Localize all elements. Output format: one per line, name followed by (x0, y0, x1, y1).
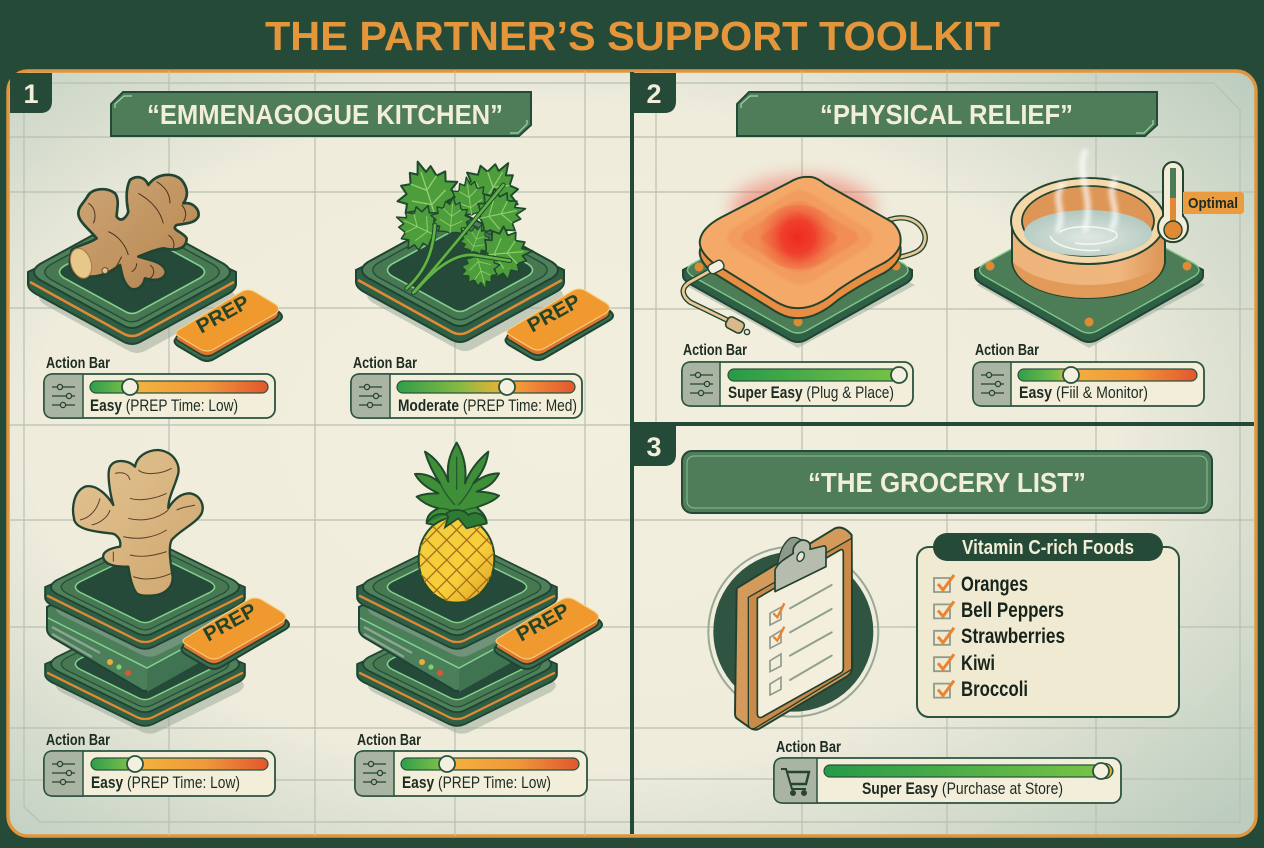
button: prep (494, 598, 602, 669)
action bar: easy: Action Bar (46, 355, 110, 372)
action bar: easy fiil and monitor: Easy (Fiil & Monitor) (1019, 384, 1148, 402)
list: vitamin c-rich foods (917, 533, 1179, 717)
action bar: easy: Easy (PREP Time: Low) (90, 397, 238, 415)
action bar: moderate: Action Bar (353, 355, 417, 372)
icon: shopping cart (781, 769, 809, 795)
badge 1 (10, 73, 52, 113)
badge 3 (630, 426, 676, 466)
icon: clipboard (708, 527, 878, 730)
button: prep: PREP (193, 291, 253, 338)
item: strawberries (934, 625, 1065, 648)
icon: fresh ginger (73, 450, 203, 596)
action bar: purchase at store: Super Easy (Purchase at Store) (862, 780, 1063, 798)
item: oranges: Oranges (961, 573, 1028, 596)
action bar: purchase at store (774, 739, 1121, 803)
item: fresh ginger on server stack (44, 450, 289, 796)
item: heating pad (682, 176, 925, 406)
button: prep (506, 289, 613, 360)
platform (683, 209, 915, 348)
action bar: easy (44, 732, 275, 796)
icon: cord (683, 218, 925, 335)
action bar: purchase at store: Action Bar (776, 739, 841, 756)
action bar: super easy: Action Bar (683, 342, 747, 359)
action bar: super easy (682, 342, 913, 406)
item: strawberries: Strawberries (961, 625, 1065, 648)
item: pineapple on server stack (355, 443, 602, 796)
action bar: easy (355, 732, 587, 796)
action bar: easy (44, 355, 275, 418)
panel: physical relief (630, 73, 1244, 406)
action bar: moderate: Moderate (PREP Time: Med) (398, 397, 577, 415)
action bar: moderate (351, 355, 582, 418)
button: prep: PREP (200, 599, 260, 646)
icon: basin of water (1011, 178, 1165, 298)
icon: heat glow (731, 176, 875, 240)
item: warm bath (973, 152, 1244, 406)
heading: emmenagogue kitchen: “EMMENAGOGUE KITCHEN” (147, 99, 503, 130)
panel: emmenagogue kitchen (10, 73, 613, 796)
action bar: easy: Easy (PREP Time: Low) (91, 774, 240, 792)
platform stack (357, 539, 557, 734)
action bar: easy: Action Bar (357, 732, 421, 749)
platform (975, 209, 1205, 348)
heading: the grocery list (682, 451, 1212, 513)
badge 3: 3 (646, 432, 662, 462)
heading: emmenagogue kitchen (111, 92, 531, 136)
platform (28, 216, 236, 353)
platform (356, 214, 564, 351)
heading: physical relief (737, 92, 1157, 136)
panel: the grocery list (630, 426, 1212, 803)
icon: heating pad (700, 177, 901, 318)
action bar: super easy: Super Easy (Plug & Place) (728, 384, 894, 402)
action bar: easy fiil and monitor (973, 342, 1204, 406)
icon: parsley (387, 147, 535, 294)
item: parsley on plate (351, 147, 613, 418)
panel dividers (632, 72, 1254, 834)
icon: thermometer (1158, 162, 1188, 242)
badge 2: 2 (646, 79, 662, 109)
icon: steam (1058, 152, 1115, 230)
item: broccoli (934, 678, 1028, 701)
item: bell peppers: Bell Peppers (961, 599, 1064, 622)
button: prep: PREP (513, 599, 573, 646)
action bar: easy: Easy (PREP Time: Low) (402, 774, 551, 792)
button: prep (174, 290, 282, 361)
button: prep: PREP (524, 290, 584, 337)
action bar: easy: Action Bar (46, 732, 110, 749)
callout: optimal: Optimal (1188, 195, 1238, 212)
item: broccoli: Broccoli (961, 678, 1028, 701)
icon: ginger root (67, 175, 199, 289)
heading: physical relief: “PHYSICAL RELIEF” (820, 99, 1073, 130)
icon: pineapple (414, 442, 500, 604)
action bar: easy fiil and monitor: Action Bar (975, 342, 1039, 359)
item: oranges (934, 573, 1028, 596)
title: THE PARTNER’S SUPPORT TOOLKIT (265, 13, 1000, 59)
badge 2 (630, 73, 676, 113)
item: kiwi (934, 652, 995, 675)
item: kiwi: Kiwi (961, 652, 995, 675)
item: ginger on plate (28, 175, 282, 418)
list title: Vitamin C-rich Foods (962, 537, 1134, 559)
item: bell peppers (934, 599, 1064, 622)
badge 1: 1 (23, 79, 39, 109)
list title (933, 533, 1163, 561)
button: prep (182, 598, 289, 669)
heading: the grocery list: “THE GROCERY LIST” (808, 467, 1086, 498)
platform stack (45, 539, 245, 734)
